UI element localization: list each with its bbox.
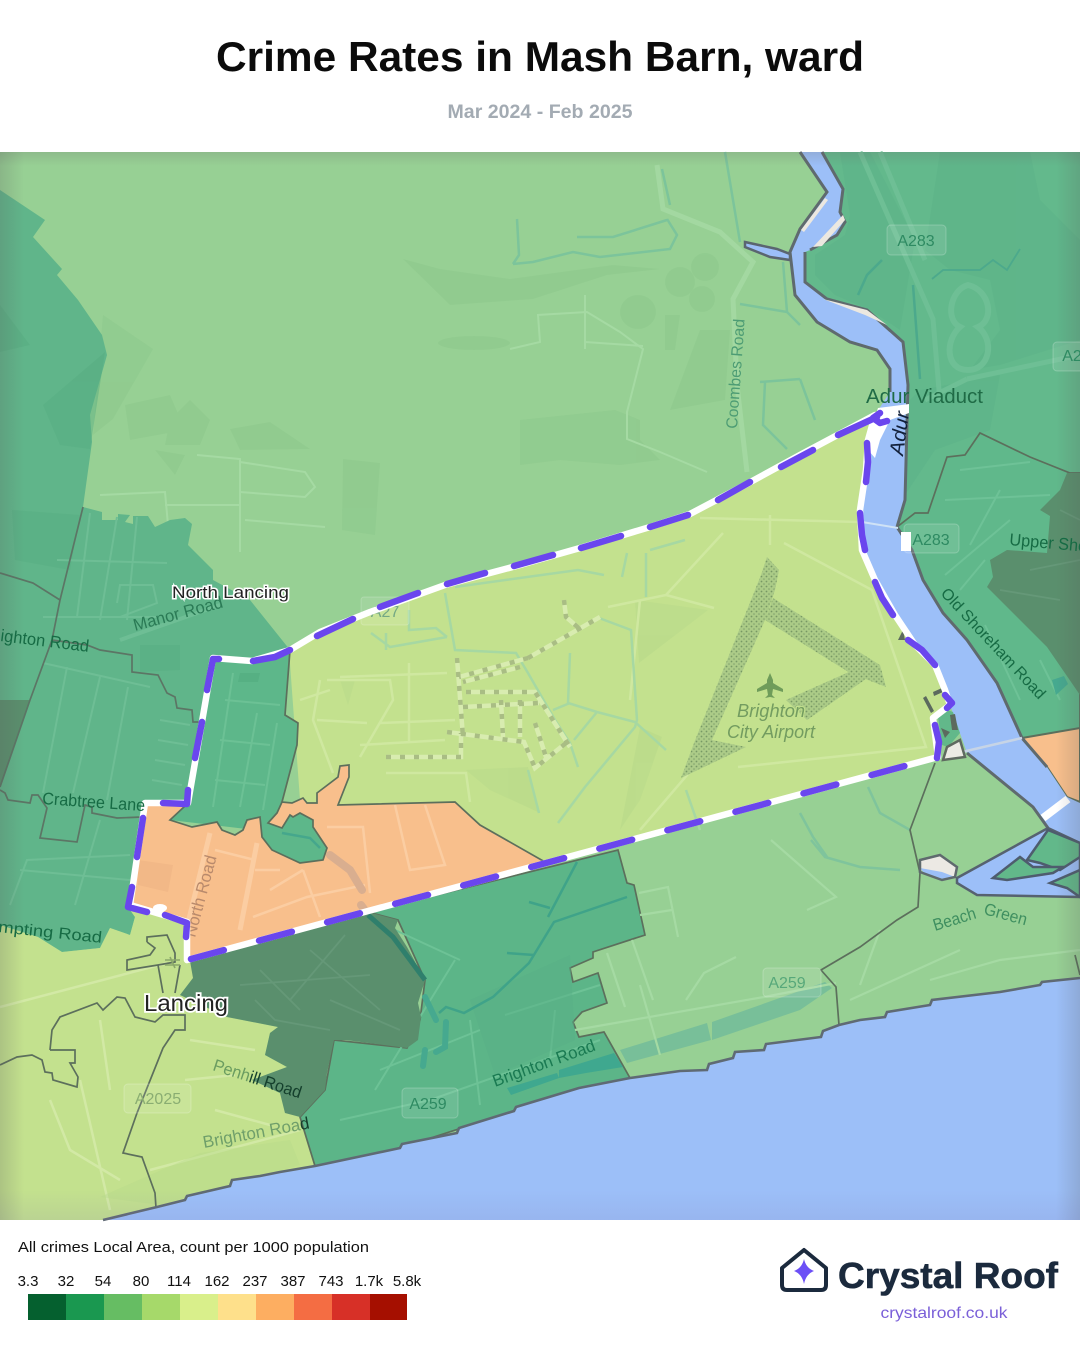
map — [0, 152, 1080, 1220]
ward field patches — [340, 600, 708, 830]
wharf — [943, 740, 965, 760]
ward streams — [371, 540, 700, 830]
ward boundary: dashed outline — [128, 413, 952, 960]
icon: airport plane — [757, 673, 783, 698]
legend values: 3.3 — [18, 1273, 38, 1290]
legend — [18, 1239, 422, 1320]
orange area: stream — [330, 855, 364, 909]
map labels: mpting Road — [0, 919, 103, 947]
south west streets — [0, 963, 300, 1210]
top area field patches — [93, 253, 730, 535]
south parks along road — [507, 1073, 559, 1095]
manor road — [120, 605, 220, 640]
south area: dark block — [180, 912, 425, 1117]
south-east boundaries — [821, 763, 1080, 1025]
west wards: mid green — [0, 190, 290, 952]
airport runways — [681, 557, 886, 778]
estuary islands — [993, 830, 1080, 897]
dark patch streets — [1000, 510, 1080, 600]
south west area: yellow-green — [0, 907, 315, 1220]
road badge under boundary: A27 — [361, 597, 409, 625]
map labels: Old Shoreham Road — [937, 585, 1048, 703]
subtitle: date range: Mar 2024 - Feb 2025 — [448, 102, 633, 123]
map labels: Adur Viaduct — [866, 386, 983, 408]
dark stream — [368, 915, 425, 980]
south area streets — [340, 930, 600, 1120]
legend values: 32 — [58, 1273, 74, 1290]
top area roads — [100, 295, 707, 552]
south west boundaries — [0, 935, 315, 1208]
coastline — [103, 978, 1080, 1220]
dark block streets — [240, 935, 400, 1030]
road numbers: A259 — [768, 975, 806, 992]
road badges — [124, 225, 1080, 1118]
legend values — [18, 1273, 422, 1290]
white road at viaduct — [868, 404, 909, 458]
airport label: City Airport — [727, 722, 816, 742]
road label: North Road: North Road — [181, 853, 221, 939]
map labels: Brighton Road — [201, 1114, 311, 1152]
map labels: ighton Road — [0, 626, 90, 656]
south streams — [439, 862, 627, 1013]
airport label: Brighton — [737, 701, 805, 721]
ward streets — [300, 515, 926, 830]
legend values: 54 — [95, 1273, 111, 1290]
west ward boundaries — [0, 507, 200, 842]
ward: green strip and pocket — [170, 650, 330, 865]
ward internal outlines — [170, 650, 545, 863]
east bank streams — [858, 249, 1020, 379]
legend values: 114 — [167, 1273, 191, 1290]
legend values: 5.8k — [393, 1273, 422, 1290]
estuary — [957, 828, 1080, 897]
river adur — [790, 152, 1080, 845]
road badge under boundary: A27: A27 — [371, 604, 399, 621]
place labels: North Lancing — [172, 583, 289, 602]
streams: top area — [513, 152, 815, 449]
south area: mid green — [300, 850, 645, 1166]
map labels: Brighton Road — [490, 1036, 598, 1091]
map labels: Green — [982, 900, 1029, 929]
orange area details — [188, 805, 445, 930]
south area inner field — [470, 955, 575, 1075]
legend colour scale — [28, 1294, 407, 1320]
west street lines — [10, 513, 190, 905]
map labels — [0, 318, 1080, 1152]
east bank roads — [860, 152, 1080, 402]
west dark wedge — [0, 700, 30, 787]
title: Crime Rates in Mash Barn, ward — [216, 33, 864, 80]
road numbers: A2025 — [135, 1091, 181, 1108]
wetland buildings — [898, 630, 958, 738]
road numbers: A283 — [912, 532, 950, 549]
map labels: Beach — [931, 904, 978, 935]
south teal channels — [423, 997, 446, 1066]
lower ward streets — [945, 462, 1060, 700]
legend values: 743 — [318, 1273, 344, 1290]
river label: Adur — [886, 409, 914, 458]
east bank: lower ward — [897, 433, 1080, 738]
river banks — [790, 152, 1048, 828]
small teal mark — [1052, 676, 1068, 695]
legend values: 80 — [133, 1273, 149, 1290]
logo url: crystalroof.co.uk — [880, 1305, 1009, 1322]
south west coast field — [100, 1140, 300, 1205]
edge shading — [0, 152, 24, 1220]
logo: Crystal Roof — [782, 1250, 1059, 1322]
ward fill: yellow-green — [187, 415, 950, 960]
map labels: Coombes Road — [724, 318, 749, 429]
legend values: 1.7k — [355, 1273, 384, 1290]
east bank shaded patches — [815, 152, 1080, 495]
icon: station — [165, 957, 180, 968]
orange area: shaded square — [138, 860, 173, 892]
south-east streams — [800, 787, 910, 870]
airport label — [727, 701, 816, 742]
east bank: mid green — [805, 152, 1080, 738]
legend values: 162 — [204, 1273, 230, 1290]
logo wordmark: Crystal Roof — [838, 1255, 1059, 1296]
river sand banks — [801, 198, 887, 325]
pond — [920, 855, 957, 880]
west darker patches — [0, 305, 180, 672]
boundary white base — [130, 415, 950, 960]
boundary white bump — [153, 904, 167, 912]
estate dotted paths — [386, 600, 600, 768]
east bank: dark patch — [987, 473, 1080, 695]
legend values: 387 — [280, 1273, 306, 1290]
road numbers — [135, 233, 1080, 1113]
tributary — [745, 242, 790, 260]
map base: light green area — [0, 152, 1080, 1220]
pocket stream — [282, 833, 320, 848]
boundary dashes: south edge — [191, 757, 938, 959]
road numbers: A259 — [409, 1096, 447, 1113]
legend title: All crimes Local Area, count per 1000 population — [18, 1239, 369, 1256]
white road by A283 — [901, 532, 911, 551]
wetland by airport — [938, 710, 960, 747]
road numbers: A283 — [897, 233, 935, 250]
main road: Coombes Road — [657, 165, 753, 472]
south-east streets — [575, 840, 1080, 1055]
ward: orange area — [130, 765, 545, 960]
icon: house with star — [782, 1250, 826, 1290]
map labels: Manor Road — [131, 593, 225, 635]
map labels: Crabtree Lane — [42, 789, 146, 815]
map: Lancing — [144, 990, 228, 1016]
legend values: 237 — [242, 1273, 268, 1290]
sea — [103, 978, 1080, 1220]
boundary dashes: river, top and west edges — [128, 413, 952, 937]
orange ward east — [1022, 728, 1080, 802]
green strip streets — [213, 673, 280, 810]
map labels: Penhill Road — [211, 1056, 304, 1102]
bridges and road — [862, 522, 1068, 818]
